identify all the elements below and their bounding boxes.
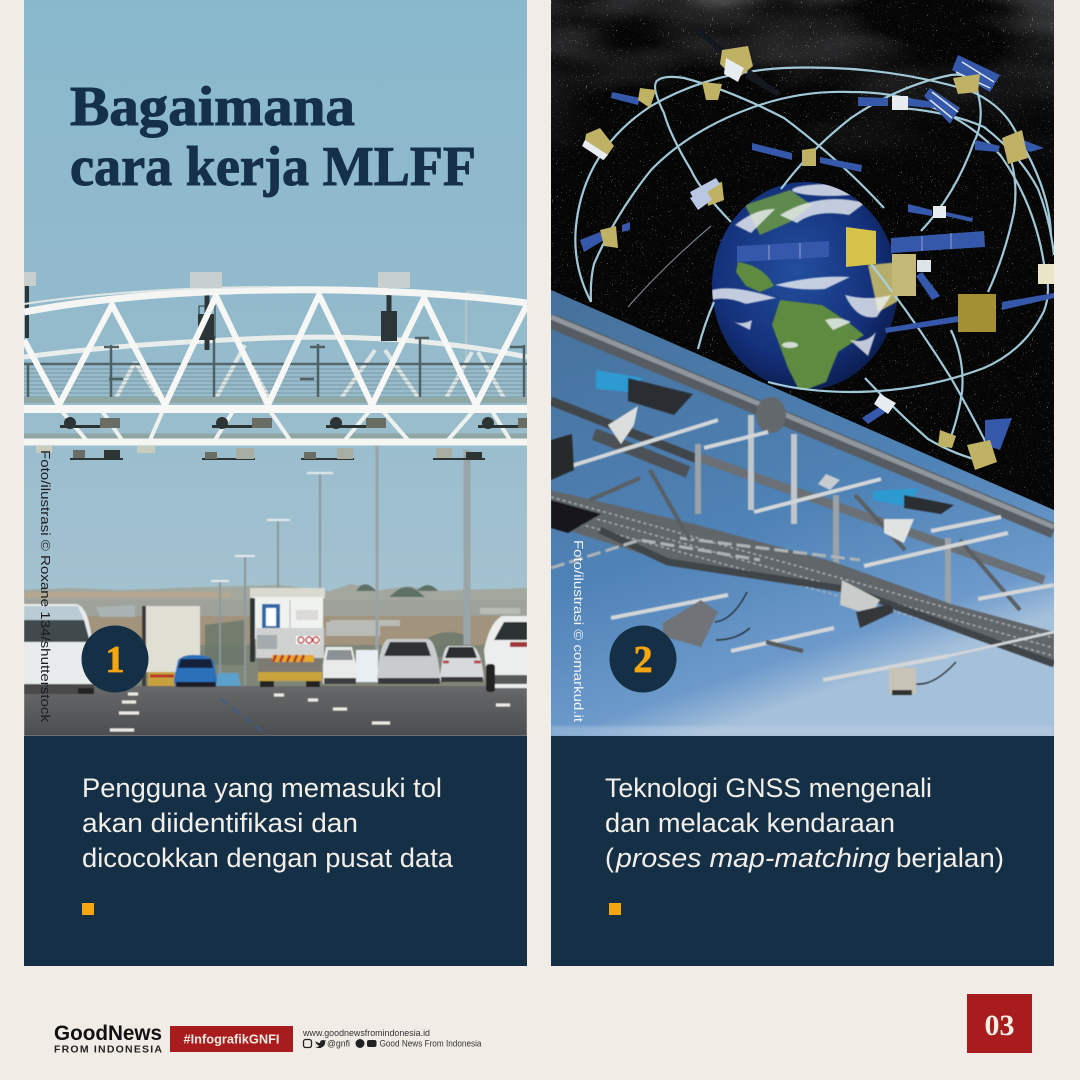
upper chord and mid pipes bbox=[551, 401, 700, 460]
step number badge 1: 1 bbox=[106, 639, 124, 681]
caption text 2: proses map-matching bbox=[615, 843, 890, 873]
website and social handles: @gnfi bbox=[327, 1038, 350, 1048]
distant town bbox=[24, 584, 527, 600]
white van behind bbox=[356, 650, 378, 682]
caption text 2: Teknologi GNSS mengenali bbox=[605, 773, 932, 803]
logo: GoodNews from Indonesia: FROM INDONESIA bbox=[54, 1044, 162, 1056]
title: cara kerja MLFF bbox=[70, 136, 476, 198]
icon: twitter bbox=[315, 1040, 326, 1048]
credit: photo 1: Foto/ilustrasi © Roxane 134/shutterstock bbox=[38, 450, 52, 723]
lower chords bbox=[24, 405, 527, 413]
credit: photo 2: Foto/ilustrasi © comarkud.it bbox=[571, 540, 585, 723]
caption panel 2 bbox=[551, 736, 1054, 966]
caption text 1: akan diidentifikasi dan bbox=[82, 808, 358, 838]
orange marker 1 bbox=[82, 903, 94, 915]
caption panel 1 bbox=[24, 736, 527, 966]
caption text 1: Pengguna yang memasuki tol bbox=[82, 773, 442, 803]
street lamps and poles bbox=[211, 292, 485, 686]
caption text 2: ( bbox=[605, 843, 614, 873]
logo: GoodNews from Indonesia: GoodNews bbox=[54, 1021, 162, 1045]
lower beam bbox=[600, 530, 1054, 664]
white suv bbox=[484, 616, 527, 688]
icon: facebook bbox=[356, 1039, 364, 1048]
caption text 2: dan melacak kendaraan bbox=[605, 808, 895, 838]
space background bbox=[551, 0, 1054, 560]
photo: satellites and gantry bbox=[551, 0, 1054, 736]
main satellite bbox=[737, 227, 985, 300]
braces bbox=[590, 470, 1020, 610]
title: Bagaimana bbox=[70, 76, 355, 138]
truss diagonals bbox=[24, 295, 527, 405]
icon: instagram bbox=[304, 1040, 312, 1048]
photo: toll gantry over highway bbox=[24, 0, 528, 736]
page number bbox=[967, 994, 1032, 1053]
panel: step 2 bbox=[551, 0, 1054, 966]
step number badge 2: 2 bbox=[634, 639, 652, 681]
footer bbox=[54, 994, 1032, 1056]
icon: youtube bbox=[367, 1040, 376, 1047]
back arch bbox=[24, 337, 527, 357]
mirror sensors bbox=[551, 370, 954, 695]
main pipe bbox=[551, 321, 1054, 531]
sign poles bbox=[204, 295, 210, 350]
silver hatchback bbox=[440, 646, 484, 682]
earth bbox=[712, 182, 900, 392]
walkway mesh bbox=[551, 490, 1054, 662]
page number: 03 bbox=[984, 1009, 1014, 1042]
cross bars bbox=[568, 420, 1054, 680]
step number badge 1 bbox=[82, 626, 148, 692]
road bbox=[24, 686, 527, 736]
website and social handles: Good News From Indonesia bbox=[380, 1038, 482, 1048]
gantry truss bbox=[24, 272, 527, 442]
orange marker 2 bbox=[609, 903, 621, 915]
website and social handles: www.goodnewsfromindonesia.id bbox=[302, 1028, 430, 1038]
gantry sky bbox=[551, 290, 1054, 736]
big truck bbox=[250, 588, 325, 598]
orbits bbox=[575, 67, 1054, 462]
hashtag badge bbox=[170, 1026, 293, 1052]
silver car bbox=[377, 639, 441, 684]
panel: step 1 bbox=[24, 0, 528, 966]
cable frame bbox=[24, 369, 527, 397]
logo: GoodNews from Indonesia bbox=[54, 1021, 162, 1056]
white van bbox=[24, 604, 94, 690]
horizon haze bbox=[551, 726, 1054, 736]
front arch bbox=[24, 290, 527, 312]
small blue car bbox=[216, 673, 241, 686]
caption text 1: dicocokkan dengan pusat data bbox=[82, 843, 454, 873]
caption text 2: berjalan) bbox=[896, 843, 1004, 873]
satellites bbox=[580, 28, 1054, 470]
vertical posts bbox=[751, 415, 794, 524]
white pickup bbox=[323, 647, 356, 684]
gantry structure bbox=[551, 317, 1054, 695]
hashtag badge: #InfografikGNFI bbox=[184, 1032, 280, 1046]
gantry sensors bbox=[24, 272, 528, 460]
blue car bbox=[174, 655, 217, 687]
website and social handles bbox=[302, 1028, 482, 1048]
white truck bbox=[142, 606, 200, 672]
step number badge 2 bbox=[610, 626, 676, 692]
